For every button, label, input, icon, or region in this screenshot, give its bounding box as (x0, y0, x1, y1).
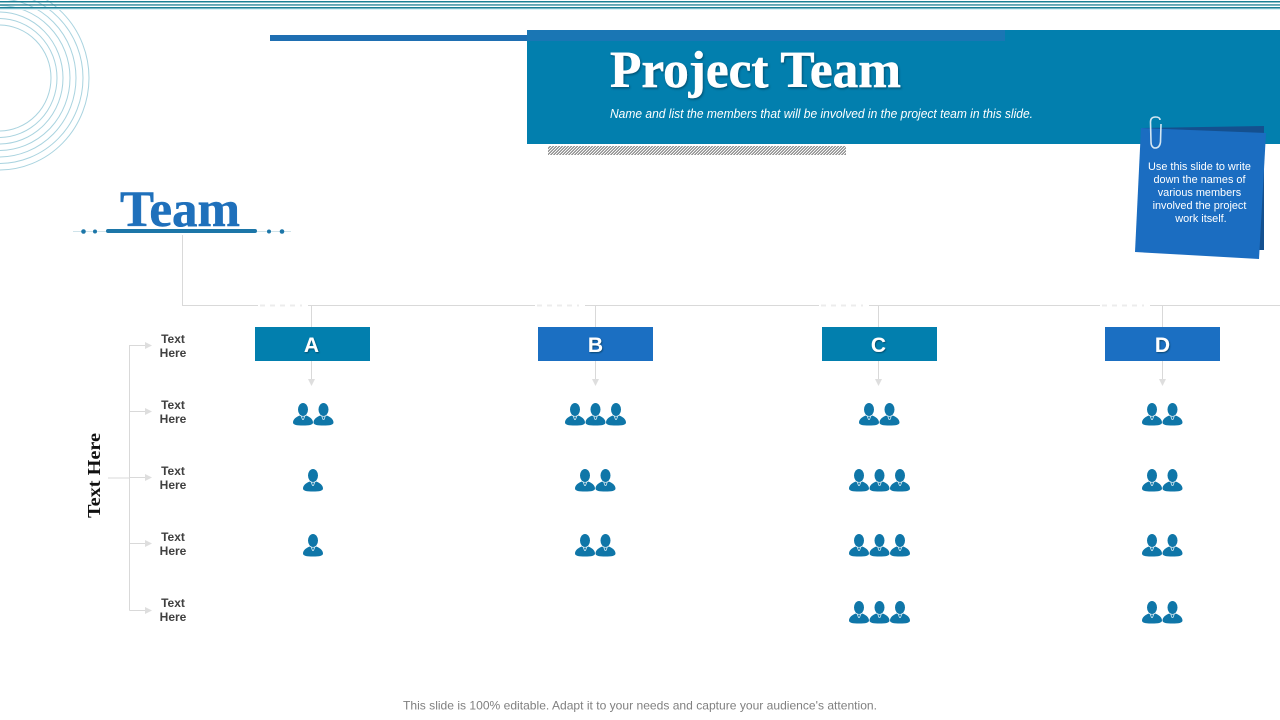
column A header: A (304, 334, 319, 357)
title: Project Team (610, 42, 901, 99)
row labels: Text (161, 332, 185, 346)
people: column B (565, 403, 626, 556)
icon: paper clip (1150, 117, 1161, 148)
note text: involved the project (1153, 200, 1246, 212)
column D header: D (1155, 334, 1170, 357)
row labels: Here (160, 346, 187, 360)
column D header (1105, 327, 1220, 361)
row labels: Text (161, 530, 185, 544)
sticky note (1135, 117, 1266, 259)
row labels: Here (160, 544, 187, 558)
people: column A (293, 403, 334, 556)
top connector tree (182, 235, 1280, 327)
column A header (255, 327, 370, 361)
note text: work itself. (1174, 213, 1227, 225)
row labels: Text (161, 398, 185, 412)
column B header: B (588, 334, 603, 357)
top stripes (0, 1, 1280, 10)
column C header: C (871, 334, 886, 357)
column B header (538, 327, 653, 361)
left tree (108, 342, 152, 614)
column C header (822, 327, 937, 361)
accent bar (270, 35, 528, 41)
heading: Team: Team (120, 182, 240, 238)
people: column D (1142, 403, 1182, 624)
people: column C (849, 403, 910, 624)
heading: Team (73, 182, 291, 238)
note text: Use this slide to write (1148, 161, 1251, 173)
row labels: Here (160, 412, 187, 426)
footer note: This slide is 100% editable. Adapt it to your needs and capture your audience's attention. (403, 698, 877, 712)
note text: various members (1158, 187, 1242, 199)
row labels: Text (161, 464, 185, 478)
row labels: Text (161, 596, 185, 610)
row labels: Here (160, 610, 187, 624)
hatch strip (548, 146, 846, 155)
header banner (527, 30, 1280, 144)
concentric circles decoration (0, 0, 89, 170)
row labels (160, 332, 187, 624)
note text: down the names of (1153, 174, 1246, 186)
column arrows (308, 361, 1166, 386)
subtitle: Name and list the members that will be involved in the project team in this slide. (610, 107, 1033, 121)
axis label: Text Here (84, 433, 104, 518)
row labels: Here (160, 478, 187, 492)
